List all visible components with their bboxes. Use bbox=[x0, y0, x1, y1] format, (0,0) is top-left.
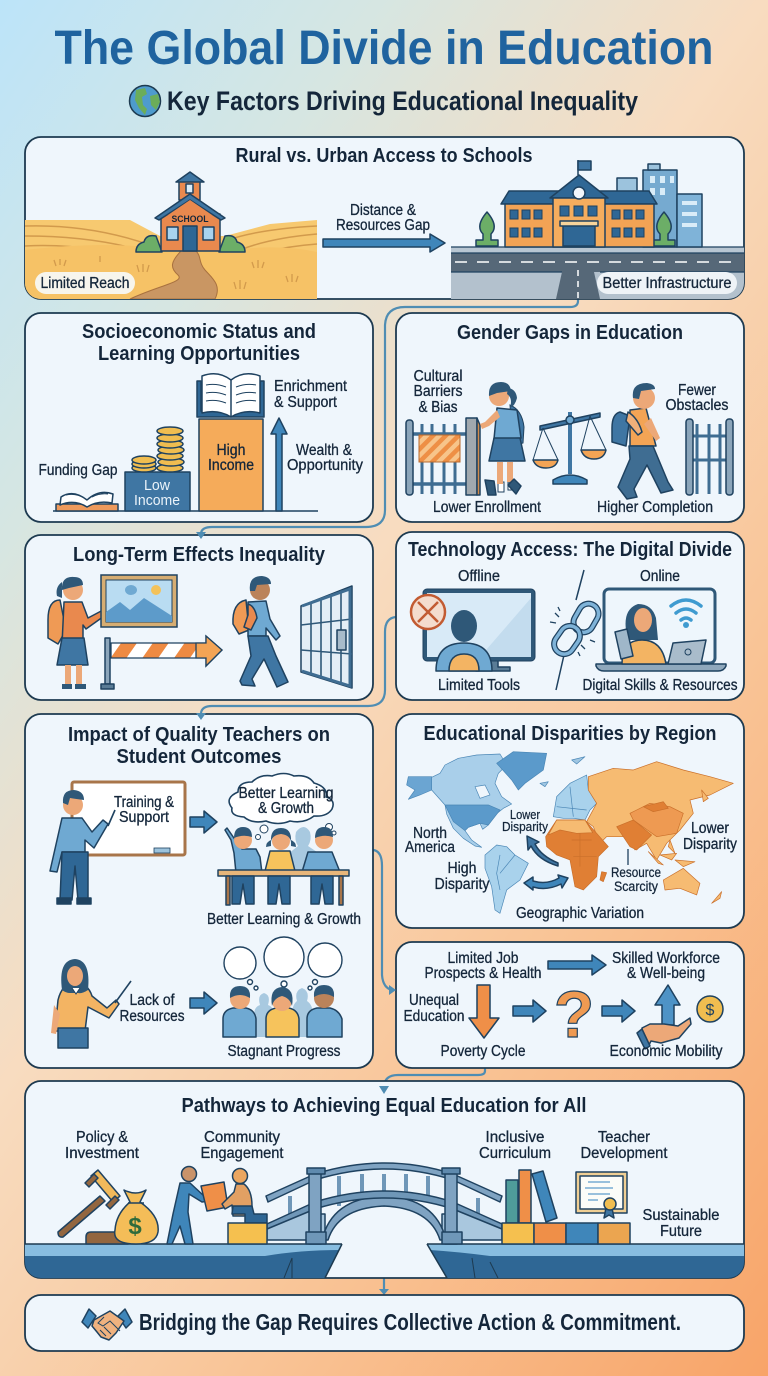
label: teacher development bbox=[580, 1129, 668, 1162]
icon: whiteboard bbox=[72, 782, 185, 855]
panel heading bbox=[82, 320, 316, 365]
icon: female teacher bbox=[51, 959, 131, 1048]
label: digital skills and resources: Digital Skills & Resources bbox=[582, 677, 738, 694]
panel: socioeconomic status bbox=[25, 313, 373, 522]
panel heading: Gender Gaps in Education bbox=[457, 321, 683, 344]
chart: income stairs bbox=[53, 418, 318, 511]
label: better learning and growth: Better Learning & Growth bbox=[207, 911, 361, 928]
label: lower disparity center: Lower bbox=[510, 807, 541, 822]
label: fewer obstacles bbox=[666, 382, 729, 414]
icon: dollar coin bbox=[697, 996, 723, 1022]
label: cultural barriers and bias bbox=[414, 368, 463, 416]
label: lower disparity right: Disparity bbox=[683, 836, 737, 853]
label: high disparity: Disparity bbox=[434, 876, 490, 893]
label: policy and investment: Investment bbox=[65, 1145, 140, 1162]
label: inclusive curriculum bbox=[479, 1129, 551, 1162]
icon: fence with barrier bbox=[406, 418, 480, 495]
label: lack of resources: Lack of bbox=[130, 992, 175, 1009]
icon: male teacher bbox=[50, 790, 115, 904]
label: lower disparity right: Lower bbox=[691, 820, 729, 837]
label: training and support: Training & bbox=[114, 794, 175, 811]
label: lower disparity center bbox=[502, 807, 548, 834]
label: enrichment and support bbox=[274, 378, 348, 411]
label: resource scarcity: Resource bbox=[611, 865, 661, 880]
label: unequal education: Unequal bbox=[409, 992, 459, 1009]
label: community engagement bbox=[200, 1129, 284, 1162]
label: policy and investment: Policy & bbox=[76, 1129, 129, 1146]
icon: closed gate door bbox=[301, 586, 352, 688]
label: lower disparity center: Disparity bbox=[502, 819, 548, 834]
icon: walking boy with backpack bbox=[233, 576, 288, 687]
label: inclusive curriculum: Inclusive bbox=[486, 1129, 544, 1146]
panel heading: Pathways to Achieving Equal Education for All bbox=[182, 1094, 586, 1117]
label: stagnant progress: Stagnant Progress bbox=[228, 1043, 341, 1060]
icon: question mark: ? bbox=[554, 977, 594, 1051]
icon: girl with backpack bbox=[480, 382, 525, 495]
label: high disparity: High bbox=[448, 860, 476, 877]
label: lower disparity right bbox=[683, 820, 737, 853]
label: sustainable future bbox=[642, 1207, 720, 1240]
connector: cycle panel to pathways panel bbox=[384, 1068, 485, 1086]
label: policy and investment bbox=[65, 1129, 140, 1162]
urban road scene bbox=[451, 247, 744, 299]
label: community engagement: Engagement bbox=[200, 1145, 284, 1162]
icon: rural schoolhouse: SCHOOL bbox=[172, 214, 209, 224]
label: unequal education bbox=[404, 992, 464, 1025]
icon: open hand bbox=[637, 1018, 691, 1049]
label: economic mobility: Economic Mobility bbox=[610, 1043, 723, 1060]
icon: stagnant students group bbox=[223, 985, 342, 1037]
icon: coin stacks bbox=[132, 427, 184, 472]
label: poverty cycle: Poverty Cycle bbox=[440, 1043, 526, 1060]
label: geographic variation: Geographic Variation bbox=[516, 905, 644, 922]
panel heading: Rural vs. Urban Access to Schools bbox=[236, 144, 532, 167]
icon: open book on high bar bbox=[197, 374, 264, 417]
arrow: two-way variation bbox=[524, 875, 568, 890]
icon: rural schoolhouse bbox=[136, 172, 245, 252]
icon: barrier arrow bbox=[101, 636, 222, 689]
thought bubbles: empty bbox=[224, 937, 342, 993]
icon: gavel bbox=[58, 1170, 128, 1244]
arrow: poverty to question bbox=[513, 1000, 546, 1022]
panel heading: Socioeconomic Status and bbox=[82, 320, 316, 343]
arrow: rural to urban bbox=[323, 234, 445, 252]
panel: rural vs urban access bbox=[25, 137, 744, 299]
connector arrowheads bbox=[196, 532, 396, 1295]
icon: bridge bbox=[266, 1163, 502, 1244]
icon: engaged students at desk bbox=[218, 827, 349, 905]
label: sustainable future: Future bbox=[660, 1223, 702, 1240]
label: inclusive curriculum: Curriculum bbox=[479, 1145, 551, 1162]
thought cloud: better learning: Better Learning bbox=[238, 785, 334, 802]
icon: boy walking bbox=[612, 383, 673, 499]
icon: open gate bbox=[686, 419, 733, 495]
arrow: question to mobility bbox=[602, 1000, 635, 1022]
icon: dollar coin: $ bbox=[706, 1002, 715, 1019]
label: lack of resources: Resources bbox=[120, 1008, 185, 1025]
panel heading: Impact of Quality Teachers on bbox=[68, 723, 330, 746]
ground cliffs bbox=[25, 1244, 744, 1278]
label: distance and resources gap bbox=[336, 202, 430, 234]
label: higher completion: Higher Completion bbox=[597, 499, 713, 516]
label: limited job prospects: Prospects & Health bbox=[424, 965, 542, 982]
label: unequal education: Education bbox=[404, 1008, 464, 1025]
icon: stacked books and blocks bbox=[502, 1170, 630, 1244]
arrow: blue mobility up bbox=[655, 985, 680, 1025]
label: online: Online bbox=[640, 568, 680, 585]
label: north america: North bbox=[413, 825, 447, 842]
panel: pathways bbox=[25, 1081, 744, 1278]
label: skilled workforce bbox=[612, 950, 720, 982]
label: limited reach: Limited Reach bbox=[40, 275, 130, 292]
chart: income stairs: Low bbox=[144, 477, 170, 494]
label: resource scarcity: Scarcity bbox=[614, 879, 658, 894]
icon: money bag bbox=[115, 1190, 158, 1244]
label: lack of resources bbox=[120, 992, 185, 1025]
label: limited tools: Limited Tools bbox=[438, 677, 520, 694]
arrow: orange poverty down bbox=[469, 985, 499, 1038]
label: distance and resources gap: Resources Gap bbox=[336, 217, 430, 234]
chart: income stairs: Income bbox=[208, 457, 254, 474]
panel heading bbox=[68, 723, 330, 768]
label: wealth and opportunity bbox=[287, 442, 363, 474]
panel heading: Student Outcomes bbox=[116, 745, 282, 768]
icon: money bag: $ bbox=[128, 1213, 142, 1240]
label: cultural barriers and bias: Cultural bbox=[414, 368, 462, 385]
panel: long-term effects bbox=[25, 535, 373, 700]
icon: urban school and city buildings bbox=[476, 160, 702, 247]
label: north america: America bbox=[405, 839, 455, 856]
panel: long-term cycle bbox=[396, 942, 744, 1068]
connector: technology panel to teachers panel bbox=[201, 617, 396, 713]
label: north america bbox=[405, 825, 455, 856]
arrow: curved lower disparity bbox=[527, 836, 558, 866]
label: wealth and opportunity: Opportunity bbox=[287, 457, 363, 474]
label: enrichment and support: & Support bbox=[274, 394, 338, 411]
label: training and support bbox=[114, 794, 175, 826]
chart: income stairs: High bbox=[216, 442, 246, 459]
panel: conclusion bbox=[25, 1295, 744, 1351]
panel: quality teachers bbox=[25, 714, 373, 1068]
icon: globe bbox=[130, 86, 160, 116]
label: sustainable future: Sustainable bbox=[642, 1207, 720, 1224]
label: lower enrollment: Lower Enrollment bbox=[433, 499, 542, 516]
label: better infrastructure: Better Infrastructure bbox=[602, 275, 732, 292]
label: resource scarcity bbox=[611, 849, 661, 894]
label: limited job prospects: Limited Job bbox=[448, 950, 518, 967]
label: high disparity bbox=[434, 860, 490, 893]
arrow: resources to stagnation bbox=[190, 992, 217, 1014]
title: The Global Divide in Education bbox=[54, 22, 714, 75]
label: cultural barriers and bias: Barriers bbox=[414, 383, 463, 400]
connector: rural panel to socioeconomic and long-term panels bbox=[201, 299, 578, 533]
icon: girl pointing at picture bbox=[48, 577, 115, 689]
panel heading: Long-Term Effects Inequality bbox=[73, 543, 326, 566]
thought cloud: better learning: & Growth bbox=[258, 800, 314, 817]
label: funding gap: Funding Gap bbox=[38, 462, 118, 479]
label: wealth and opportunity: Wealth & bbox=[296, 442, 353, 459]
label: offline: Offline bbox=[458, 568, 500, 585]
label: enrichment and support: Enrichment bbox=[274, 378, 348, 395]
icon: offline monitor with person bbox=[411, 589, 535, 671]
chart: world map bbox=[407, 752, 733, 913]
rural field scene bbox=[25, 220, 317, 299]
icon: certificate bbox=[576, 1172, 627, 1218]
icon: two people passing a book bbox=[167, 1166, 267, 1244]
label: fewer obstacles: Fewer bbox=[678, 382, 716, 399]
connector: teachers panel to cycle panel bbox=[373, 850, 392, 990]
arrow: jobs to workforce bbox=[548, 955, 606, 975]
subtitle: Key Factors Driving Educational Inequality bbox=[167, 86, 638, 116]
label: training and support: Support bbox=[119, 809, 170, 826]
icon: balance scale bbox=[533, 412, 606, 484]
icon: broken chain bbox=[550, 570, 602, 690]
label: skilled workforce: & Well-being bbox=[627, 965, 705, 982]
label: distance and resources gap: Distance & bbox=[350, 202, 417, 219]
icon: framed landscape picture bbox=[101, 575, 177, 627]
label: teacher development: Teacher bbox=[598, 1129, 650, 1146]
label: teacher development: Development bbox=[580, 1145, 668, 1162]
connector: pathways panel to conclusion bbox=[383, 1278, 385, 1290]
label: community engagement: Community bbox=[204, 1129, 280, 1146]
chart: income stairs: Income bbox=[134, 492, 180, 509]
panel: gender gaps bbox=[396, 313, 744, 522]
label: limited job prospects bbox=[424, 950, 542, 982]
label: skilled workforce: Skilled Workforce bbox=[612, 950, 720, 967]
panel heading: Educational Disparities by Region bbox=[424, 722, 716, 745]
icon: laptop with woman online bbox=[596, 589, 726, 671]
panel heading: Learning Opportunities bbox=[98, 342, 300, 365]
icon: small book bbox=[56, 492, 118, 511]
icon: handshake bbox=[82, 1309, 132, 1340]
label: fewer obstacles: Obstacles bbox=[666, 397, 729, 414]
panel: regional disparities bbox=[396, 714, 744, 928]
thought cloud: better learning bbox=[229, 774, 336, 840]
panel: digital divide bbox=[396, 532, 744, 700]
arrow: training to learning bbox=[190, 811, 217, 833]
label: cultural barriers and bias: & Bias bbox=[418, 399, 458, 416]
